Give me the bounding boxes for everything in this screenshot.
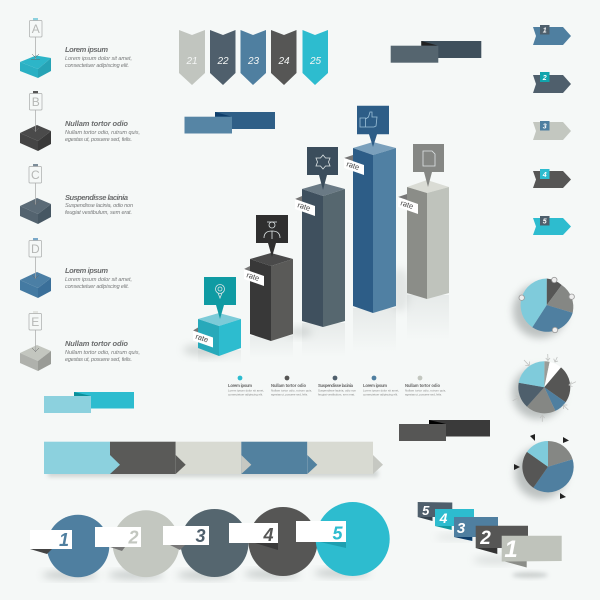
pie chart with triangle markers — [514, 434, 574, 499]
tab 24 — [271, 30, 296, 85]
step D: Lorem ipsum — [65, 266, 108, 275]
arrow tip 5 — [373, 455, 383, 474]
rate tag 3 — [295, 196, 315, 216]
bar 3: slate — [302, 183, 345, 327]
arrow tag 4 — [533, 169, 571, 188]
legend item 2: Nullam tortor odio — [271, 383, 306, 388]
chart: 3D bar chart — [183, 106, 449, 364]
arrow tag 5: 5 — [543, 218, 547, 226]
arrow tip 1 — [110, 455, 120, 474]
segment 1 — [44, 442, 110, 474]
arrow tip 3 — [241, 455, 251, 474]
step A: Lorem ipsum dolor sit amet, — [65, 56, 132, 62]
tab 22 — [210, 30, 236, 85]
callout: star icon — [307, 147, 338, 190]
ribbon 5: 5 — [422, 503, 430, 518]
rate tag 1: rate — [194, 332, 209, 344]
bar 5: grey — [407, 180, 449, 299]
tab 23: 23 — [247, 56, 259, 67]
ribbon 2 — [476, 526, 528, 554]
tab 23 — [240, 30, 266, 85]
legend item 4: Lorem ipsum dolor sit amet, — [363, 388, 399, 392]
step A: A — [32, 22, 40, 36]
callout: thumbs up icon — [357, 106, 389, 147]
step B — [20, 91, 140, 151]
step B: Nullam tortor odio — [65, 119, 128, 128]
tab 21: 21 — [185, 56, 198, 67]
legend item 2: Nullam tortor odio, rutrum quis, — [271, 388, 312, 392]
tab 22: 22 — [216, 56, 229, 67]
rate tag 2: rate — [245, 270, 260, 283]
panel: stacked numbered ribbons — [418, 502, 562, 578]
ribbon 3: 3 — [457, 520, 466, 537]
callout: bulb icon — [204, 277, 236, 319]
rate tag 3: rate — [296, 200, 311, 213]
ribbon 4 — [435, 509, 474, 530]
tab 24: 24 — [277, 56, 290, 67]
pie chart with ring markers — [513, 277, 574, 338]
step E: E — [31, 315, 39, 329]
rate tag 2 — [244, 266, 264, 286]
legend item 4: consectetuer adipiscing elit. — [363, 392, 398, 396]
ribbon 3 — [454, 517, 498, 541]
circle 2 — [95, 510, 179, 577]
legend item 4 — [363, 376, 399, 396]
step B: Nullam tortor odio, rutrum quis, — [65, 130, 140, 136]
arrow tag 3: 3 — [543, 124, 547, 130]
rate tag 4 — [344, 155, 364, 175]
rate tag 4: rate — [345, 159, 360, 172]
step D: consectetuer adipiscing elit. — [65, 284, 129, 290]
circle 4: 4 — [262, 525, 274, 545]
step C: Suspendisse lacinia — [65, 193, 128, 202]
step E — [20, 311, 140, 371]
step C: Suspendisse lacinia, odio non — [65, 203, 133, 209]
arrow tip 2 — [176, 455, 186, 474]
panel: lettered step list — [20, 18, 140, 371]
segment 4 — [241, 442, 307, 474]
ribbon: blue — [184, 112, 275, 134]
bar 1: cyan — [198, 313, 241, 356]
circle 4 — [229, 507, 318, 576]
panel: numbered chevron tabs 21-25 — [179, 30, 328, 85]
rate tag 5: rate — [399, 198, 414, 211]
arrow tag 4: 4 — [542, 172, 547, 179]
circle 3: 3 — [195, 526, 206, 546]
chart legend — [228, 376, 446, 396]
legend item 5: Nullam tortor odio, rutrum quis, — [405, 388, 446, 392]
panel: numbered arrow tags — [533, 25, 571, 235]
ribbon 4: 4 — [439, 510, 448, 526]
legend item 5 — [405, 376, 446, 396]
rate tag 5 — [398, 194, 418, 214]
ribbon 1 — [502, 536, 562, 568]
step A: consectetuer adipiscing elit. — [65, 63, 129, 69]
panel: numbered circles — [30, 502, 390, 579]
step E: Nullam tortor odio, rutrum quis, — [65, 350, 140, 356]
bar reflections and shadows — [183, 268, 449, 364]
tab 25: 25 — [309, 56, 321, 67]
legend item 4: Lorem ipsum — [363, 383, 387, 388]
legend item 2: egestas ut, posuere sed, felis. — [271, 392, 308, 396]
ribbon 1: 1 — [504, 536, 518, 563]
rate tag 1 — [193, 328, 213, 348]
legend item 3: Suspendisse lacinia — [318, 383, 354, 388]
segment 2 — [110, 442, 176, 474]
circle 1: 1 — [59, 530, 69, 550]
arrow tag 3 — [533, 121, 571, 140]
arrow tag 5 — [533, 216, 571, 235]
callout: person icon — [256, 215, 288, 257]
circle 3 — [163, 509, 248, 577]
ribbon shadows — [435, 534, 548, 578]
legend item 1: Lorem ipsum dolor sit amet, — [228, 388, 264, 392]
circle 2: 2 — [127, 528, 138, 548]
step E: egestas ut, posuere sed, felis. — [65, 357, 132, 363]
tab 21 — [179, 30, 205, 85]
arrow tag 2: 2 — [542, 75, 547, 82]
segment 3 — [176, 442, 241, 474]
arrow tag 1 — [533, 25, 571, 45]
ribbon 2: 2 — [479, 528, 491, 549]
circle 5: 5 — [332, 524, 343, 544]
bar 2: black — [250, 253, 293, 341]
callout: document icon — [413, 144, 444, 187]
ribbon: dark grey — [399, 420, 490, 441]
step B: B — [32, 95, 40, 109]
legend item 5: Nullam tortor odio — [405, 383, 440, 388]
legend item 1: Lorem ipsum — [228, 383, 252, 388]
circle 1 — [30, 515, 109, 577]
step D: D — [31, 242, 40, 256]
step B: egestas ut, posuere sed, felis. — [65, 137, 132, 143]
bar 4: blue — [353, 142, 396, 313]
legend item 3: Suspendisse lacinia, odio non — [318, 388, 356, 392]
legend item 3: feugiat vestibulum, sem erat. — [318, 392, 355, 396]
ribbon: slate — [391, 41, 481, 63]
arrow tip 4 — [307, 455, 317, 474]
legend item 2 — [271, 376, 312, 396]
step C: C — [31, 168, 40, 182]
legend item 1: consectetuer adipiscing elit. — [228, 392, 263, 396]
step D: Lorem ipsum dolor sit amet, — [65, 277, 132, 283]
arrow tag 1: 1 — [543, 28, 547, 34]
step A: Lorem ipsum — [65, 45, 108, 54]
arrow process bar — [44, 442, 383, 477]
step C: feugiat vestibulum, sem erat. — [65, 210, 132, 216]
tab 25 — [302, 30, 328, 85]
legend item 5: egestas ut, posuere sed, felis. — [405, 392, 442, 396]
legend item 1 — [228, 376, 264, 396]
step C — [20, 164, 133, 224]
step D — [20, 238, 132, 298]
ribbon: light teal — [44, 392, 134, 413]
legend item 3 — [318, 376, 356, 396]
circle 5 — [296, 502, 390, 576]
circle shadows — [42, 569, 370, 579]
step A — [20, 18, 132, 78]
ribbon 5 — [418, 502, 452, 521]
segment 5 — [307, 442, 373, 474]
pie chart with arrow markers — [512, 354, 576, 422]
arrow tag 2 — [533, 72, 571, 93]
step E: Nullam tortor odio — [65, 339, 128, 348]
